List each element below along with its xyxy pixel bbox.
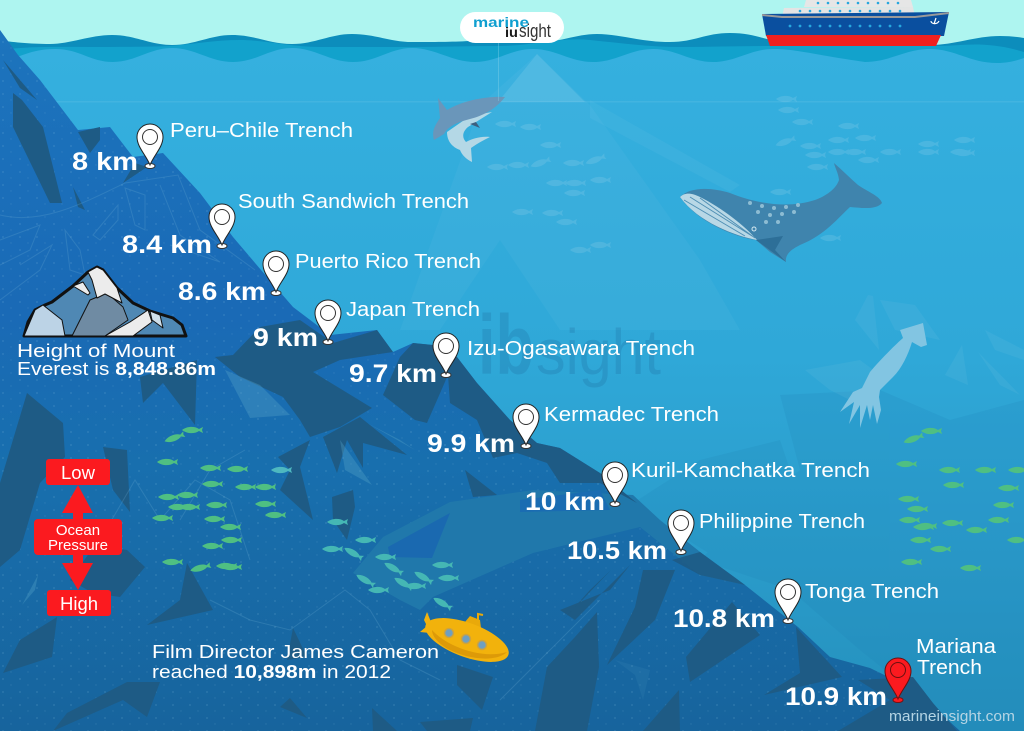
cameron caption: Film Director James Cameron [152,642,439,662]
high label: High [60,593,98,614]
waves [0,33,1024,75]
logo: iu [505,24,518,40]
squid [840,323,927,428]
trench: Tonga: Tonga Trench [805,580,939,603]
trench: Mariana: Trench [917,656,982,679]
trench: Tonga: 10.8 km [673,605,775,633]
logo: marine [473,14,529,30]
trench: Kermadec [427,403,719,458]
trench: Japan [253,298,480,352]
trench: Japan: 9 km [253,324,318,352]
cameron caption [152,642,439,682]
shark [433,97,505,162]
trench: Kermadec: 9.9 km [427,430,515,458]
green fish schools [152,427,1024,574]
trench: Puerto Rico: Puerto Rico Trench [295,250,481,273]
rock outlines [0,175,600,700]
trench: Kuril-Kamchatka: Kuril-Kamchatka Trench [631,459,870,482]
trench: Mariana: Mariana [916,635,997,658]
trench: Izu-Ogasawara: Izu-Ogasawara Trench [467,337,695,360]
lighter seabed plateau [353,490,745,610]
cameron caption: reached 10,898m in 2012 [152,662,391,682]
logo [460,12,564,101]
trench: Peru-Chile: 8 km [72,148,138,176]
pressure scale [34,459,122,616]
mountain icon [24,267,186,336]
fish school: pale upper [487,96,975,253]
trench: Kuril-Kamchatka: 10 km [525,488,605,516]
trench: Tonga [673,579,939,633]
teal fish school [322,519,459,611]
trench: Puerto Rico [178,250,481,306]
ship [762,0,949,46]
trench: Kermadec: Kermadec Trench [544,403,719,426]
logo: sight [519,21,551,41]
distant rocks right [630,390,1024,731]
trench: Izu-Ogasawara: 9.7 km [349,360,437,388]
trench: Puerto Rico: 8.6 km [178,278,266,306]
trench: Izu-Ogasawara [349,333,695,388]
trench: Philippine [567,510,865,565]
trench: Japan: Japan Trench [346,298,480,321]
watermark: ib [478,298,534,392]
trench: Peru-Chile: Peru–Chile Trench [170,119,353,142]
trench: Philippine: 10.5 km [567,537,667,565]
everest caption: Everest is 8,848.86m [17,359,216,379]
trench: South Sandwich [122,190,469,259]
watermark [478,298,661,392]
trench: Mariana [785,635,997,711]
everest caption: Height of Mount [17,341,175,361]
pale rock facets [805,295,1024,400]
website credit: marineinsight.com [889,709,1015,725]
ocean pressure label: Ocean [56,522,100,539]
everest caption [17,341,216,379]
trench: Kuril-Kamchatka [525,459,870,516]
sky [0,0,1024,70]
pale seabed facets [22,370,650,700]
high label [47,590,111,616]
ocean pressure label [34,519,122,555]
trench: Mariana: 10.9 km [785,683,887,711]
whale [680,163,882,262]
trench: Philippine: Philippine Trench [699,510,865,533]
ocean pressure label: Pressure [48,537,108,554]
submarine [420,609,514,671]
trench: Peru-Chile [72,119,353,176]
watermark: sight [536,316,661,388]
low label: Low [61,462,96,483]
light beams [0,54,1024,330]
trench: South Sandwich: 8.4 km [122,231,212,259]
low label [46,459,110,485]
trench: South Sandwich: South Sandwich Trench [238,190,469,213]
